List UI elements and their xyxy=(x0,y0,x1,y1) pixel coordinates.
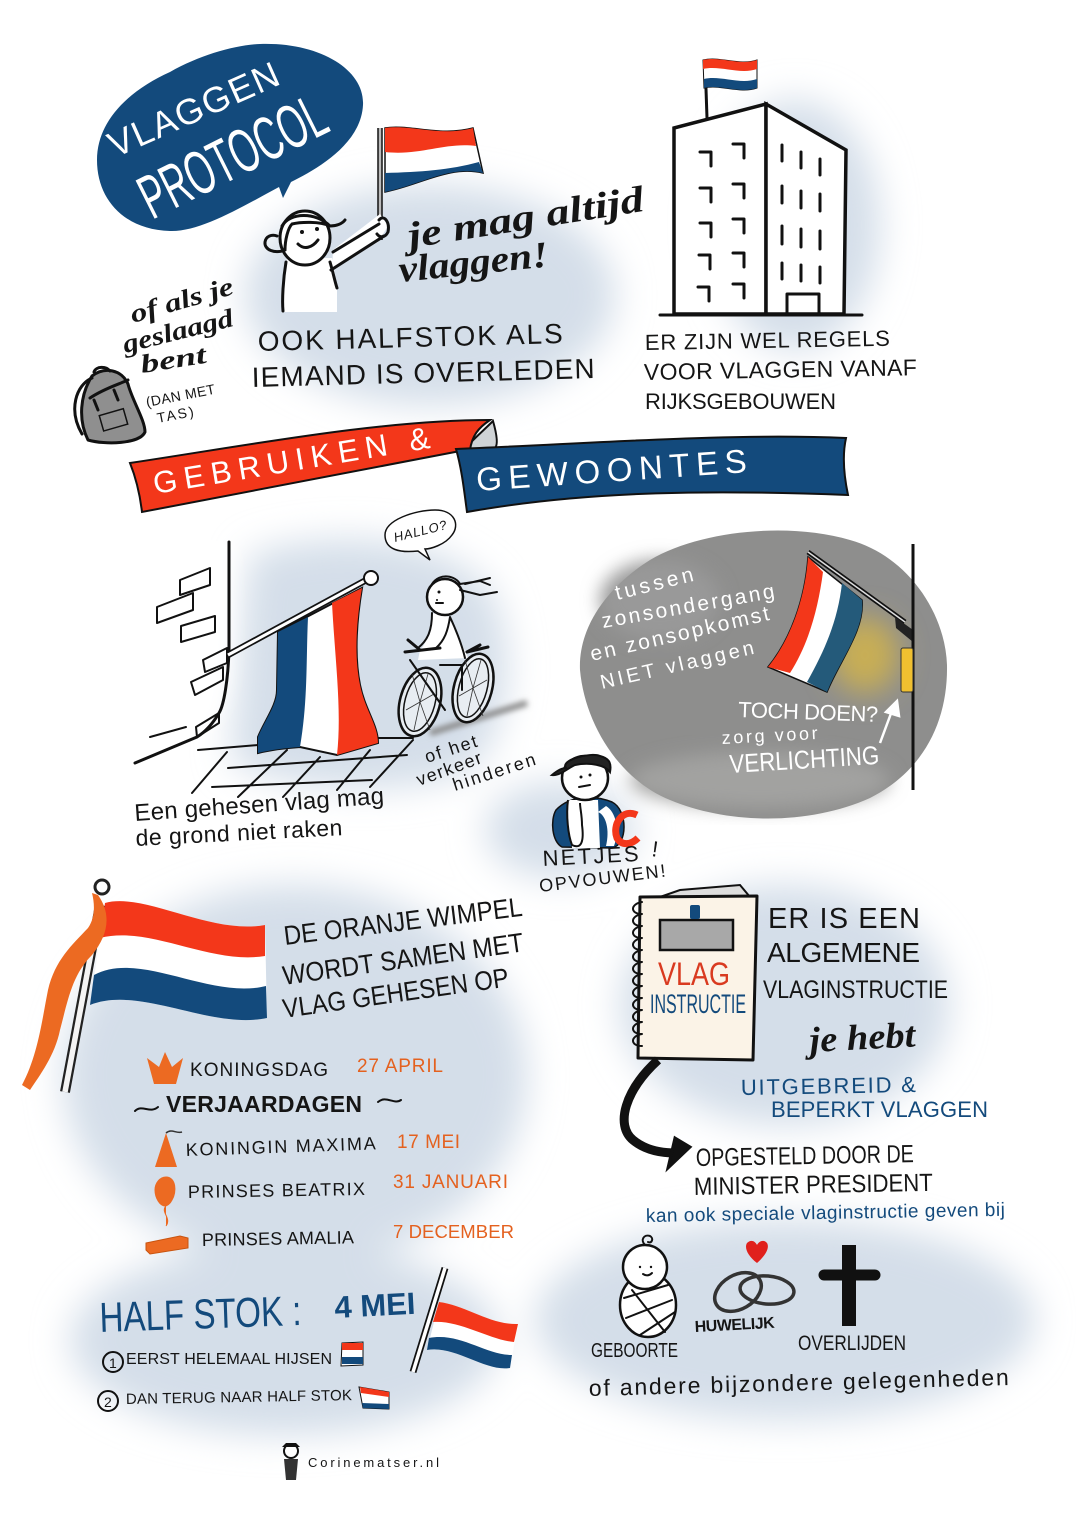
night text: zorg voor xyxy=(721,723,818,748)
text: of als je geslaagd bent: of als je xyxy=(127,272,237,329)
text: oranje wimpel: WORDT SAMEN MET xyxy=(281,927,525,991)
text: oranje wimpel: DE ORANJE WIMPEL xyxy=(282,892,524,951)
banner text: gewoontes: GEWOONTES xyxy=(475,442,748,498)
title: vlaggen: VLAGGEN xyxy=(102,53,285,165)
text: algemene vlaginstructie xyxy=(763,903,948,1004)
background shading blobs xyxy=(63,100,1035,1435)
text: verkeer hinderen: hinderen xyxy=(450,749,538,795)
text: verkeer hinderen xyxy=(414,731,538,795)
text: uitgebreid beperkt: UITGEBREID & xyxy=(741,1072,916,1100)
paving lines xyxy=(192,738,413,797)
icon: gift xyxy=(146,1236,188,1254)
step 1 xyxy=(103,1342,363,1372)
icon: cross xyxy=(798,1245,906,1355)
text: je mag altijd vlaggen: je mag altijd xyxy=(399,179,647,258)
text: je mag altijd vlaggen: vlaggen! xyxy=(397,234,550,291)
title: protocol: PROTOCOL xyxy=(127,81,338,233)
list: amalia: PRINSES AMALIA xyxy=(202,1227,354,1250)
notebook: vlag instructie xyxy=(633,885,757,1060)
label: geboorte: GEBOORTE xyxy=(591,1340,678,1362)
speech bubble: hallo: HALLO? xyxy=(392,517,449,545)
text: regels rijksgebouwen xyxy=(644,326,917,414)
text: opgesteld door: kan ook speciale vlaginstructie geven bij xyxy=(646,1200,1005,1227)
building with flag xyxy=(660,59,862,315)
footer logo: Corinematser.nl xyxy=(308,1455,439,1470)
icon: backpack xyxy=(75,367,145,443)
big flag with orange pennant xyxy=(22,880,267,1092)
text: netjes opvouwen: OPVOUWEN! xyxy=(538,861,667,896)
night text: TOCH DOEN? xyxy=(738,697,879,727)
step 1: EERST HELEMAAL HIJSEN xyxy=(126,1351,332,1368)
list: amalia: 7 DECEMBER xyxy=(393,1221,514,1242)
text: algemene vlaginstructie: VLAGINSTRUCTIE xyxy=(763,976,948,1004)
text: opgesteld door: MINISTER PRESIDENT xyxy=(694,1169,933,1201)
heading: half stok: 4 MEI xyxy=(334,1286,416,1325)
folding person xyxy=(552,755,638,848)
text: dan met tas: TAS) xyxy=(156,403,195,426)
text: uitgebreid beperkt xyxy=(741,1072,988,1122)
text: netjes opvouwen: ! xyxy=(650,836,660,862)
cut-out for white wall xyxy=(140,540,229,760)
title speech bubble xyxy=(97,44,363,233)
step 2: 2 xyxy=(104,1394,112,1410)
text: ook halfstok: OOK HALFSTOK ALS xyxy=(257,318,563,357)
flag on pole against wall xyxy=(228,571,378,755)
curved arrow xyxy=(624,1060,690,1168)
text: netjes opvouwen xyxy=(538,836,667,896)
list: beatrix: 31 JANUARI xyxy=(393,1172,508,1193)
label: overlijden: OVERLIJDEN xyxy=(798,1332,906,1355)
heading: verjaardagen: VERJAARDAGEN xyxy=(166,1091,362,1117)
text: oranje wimpel xyxy=(281,892,525,1024)
heading: half stok: HALF STOK : xyxy=(99,1287,302,1341)
text: opgesteld door: OPGESTELD DOOR DE xyxy=(696,1140,914,1172)
icon: party hat xyxy=(155,1133,177,1167)
text: uitgebreid beperkt: BEPERKT VLAGGEN xyxy=(771,1097,988,1122)
text: regels rijksgebouwen: RIJKSGEBOUWEN xyxy=(645,389,836,414)
footer logo xyxy=(282,1443,439,1480)
night text: tussen xyxy=(613,563,696,605)
text: of als je geslaagd bent: bent xyxy=(138,340,209,379)
night text xyxy=(588,563,880,779)
half mast flag xyxy=(413,1268,518,1372)
moon night panel xyxy=(580,530,947,819)
text: verkeer hinderen: of het xyxy=(422,731,480,767)
notebook: vlag instructie: INSTRUCTIE xyxy=(650,989,746,1019)
icon: crown xyxy=(147,1052,183,1084)
step 2: DAN TERUG NAAR HALF STOK xyxy=(126,1387,352,1408)
list: maxima: 17 MEI xyxy=(397,1132,460,1153)
icon: baby xyxy=(591,1236,678,1362)
text: gehesen vlag: de grond niet raken xyxy=(135,814,343,851)
label: huwelijk: HUWELIJK xyxy=(694,1315,776,1336)
text: ook halfstok xyxy=(251,318,595,393)
night flag xyxy=(768,552,913,692)
list: koningsdag: KONINGSDAG xyxy=(190,1060,328,1081)
step 2 xyxy=(98,1387,389,1411)
icon: rings with heart xyxy=(694,1241,795,1336)
night text: zonsondergang xyxy=(600,580,776,633)
text: regels rijksgebouwen: ER ZIJN WEL REGELS xyxy=(645,326,890,355)
flag waved by person xyxy=(380,127,483,240)
night arrow xyxy=(880,701,899,743)
list: beatrix: PRINSES BEATRIX xyxy=(188,1179,365,1202)
list: koningsdag xyxy=(147,1052,443,1084)
text: dan met tas: (DAN MET xyxy=(145,381,217,410)
text: opgesteld door xyxy=(646,1140,1005,1227)
speech bubble: hallo xyxy=(385,510,456,560)
step 1: 1 xyxy=(109,1355,117,1371)
banner text: gebruiken: GEBRUIKEN & xyxy=(150,420,433,501)
wall with bricks xyxy=(135,542,229,763)
night text: en zonsopkomst xyxy=(588,602,772,666)
text: dan met tas xyxy=(145,381,217,426)
cyclist xyxy=(392,576,527,741)
night text: VERLICHTING xyxy=(729,740,880,779)
list: koningsdag: 27 APRIL xyxy=(357,1056,443,1077)
text: oranje wimpel: VLAG GEHESEN OP xyxy=(281,963,511,1024)
text: algemene vlaginstructie: ALGEMENE xyxy=(767,937,920,968)
text: je hebt: je hebt xyxy=(803,1014,917,1060)
text: gehesen vlag: Een gehesen vlag mag xyxy=(134,783,385,827)
person with flag xyxy=(265,211,388,312)
text: je mag altijd vlaggen xyxy=(397,179,647,291)
notebook: vlag instructie: VLAG xyxy=(658,956,730,992)
icon: balloon xyxy=(155,1177,175,1226)
text: of als je geslaagd bent xyxy=(118,272,237,379)
night text: NIET vlaggen xyxy=(598,637,756,694)
list: maxima: KONINGIN MAXIMA xyxy=(185,1133,376,1160)
text: netjes opvouwen: NETJES xyxy=(542,841,639,871)
text: ook halfstok: IEMAND IS OVERLEDEN xyxy=(251,353,595,393)
list: amalia xyxy=(146,1221,514,1254)
text: andere gelegenheden: of andere bijzondere gelegenheden xyxy=(588,1364,1009,1401)
text: of als je geslaagd bent: geslaagd xyxy=(118,303,237,359)
text: algemene vlaginstructie: ER IS EEN xyxy=(768,903,920,935)
list: beatrix xyxy=(155,1172,508,1226)
text: gehesen vlag xyxy=(134,783,385,851)
banner: gebruiken & gewoontes xyxy=(130,420,848,512)
list: maxima xyxy=(155,1131,460,1167)
text: verkeer hinderen: verkeer xyxy=(414,748,484,790)
text: regels rijksgebouwen: VOOR VLAGGEN VANAF xyxy=(644,354,917,385)
